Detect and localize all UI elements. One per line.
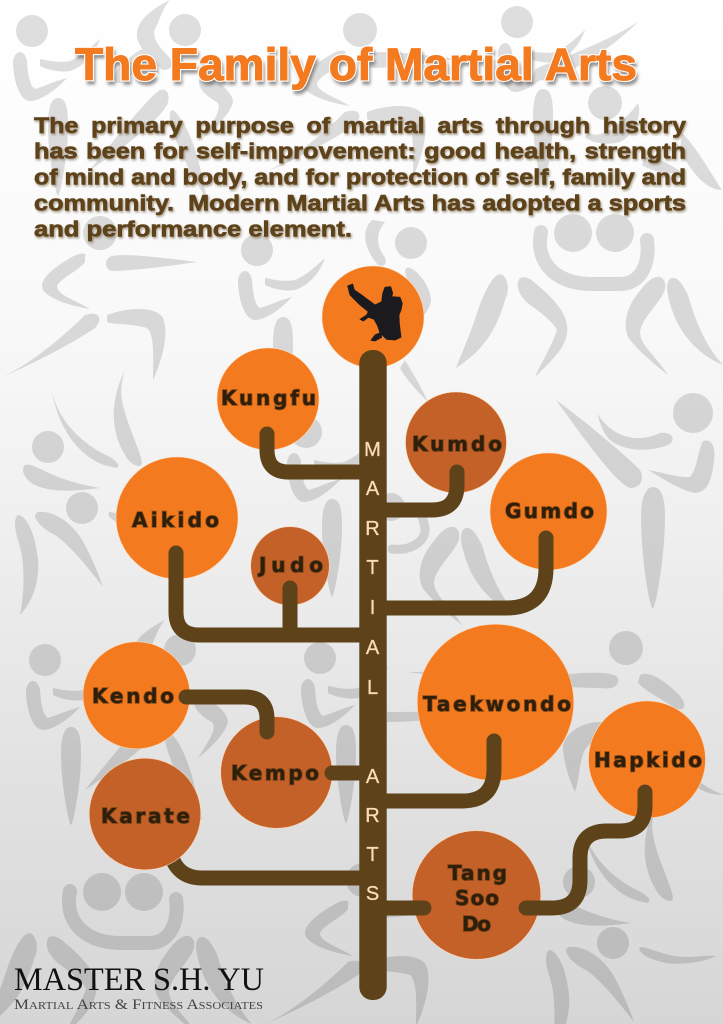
intro text block: The primary purpose of martial arts through history [35,114,688,140]
label: Kendo: Kendo [92,684,174,708]
title: The Family of Martial Arts [75,39,637,90]
node: Gumdo circle [490,453,607,570]
trunk label: MARTIAL ARTS: T [366,844,379,866]
trunk label: MARTIAL ARTS: R [365,518,380,540]
trunk label: MARTIAL ARTS [364,439,381,905]
node: Kungfu circle [217,348,319,450]
label: Tang Soo Do [448,861,507,936]
trunk label: MARTIAL ARTS: T [366,557,379,579]
label: Gumdo: Gumdo [505,499,594,523]
node: Kendo circle [83,642,190,749]
logo: Master S.H. Yu: Martial Arts & Fitness Associates [14,997,263,1013]
intro text block: and performance element. [34,216,352,242]
figure fragment right of the trunk [377,493,425,549]
trunk label: MARTIAL ARTS: L [367,677,378,699]
trunk label: MARTIAL ARTS: A [366,766,380,788]
intro text block [34,113,688,243]
label: Tang Soo Do: Do [462,912,491,936]
icon: flying kick silhouette [348,284,402,341]
branch: Tang Soo Do to Hapkido [526,792,645,908]
tree diagram [83,266,706,1000]
title: The Family of Martial Arts [75,39,637,90]
branch: Kumdo [373,472,457,510]
branch: Kungfu [267,434,373,472]
trunk label: MARTIAL ARTS: A [366,478,380,500]
intro text block: of mind and body, and for protection of self, family and [34,164,686,190]
label: Tang Soo Do: Soo [455,886,499,910]
node: Judo circle [251,527,329,605]
trunk label: MARTIAL ARTS: A [366,637,380,659]
trunk label: MARTIAL ARTS: M [364,439,381,461]
node: Tang Soo Do circle [412,831,541,959]
intro text block: community. Modern Martial Arts has adopted a sports [34,190,686,216]
logo: Master S.H. Yu [14,962,264,1013]
label: Hapkido: Hapkido [594,748,702,772]
node: Taekwondo circle [417,624,574,781]
trunk label: MARTIAL ARTS: S [366,883,379,905]
node: top circle [322,266,424,368]
label: Tang Soo Do: Tang [448,861,507,885]
intro text block: and performance element. [35,218,353,243]
label: Kumdo: Kumdo [412,432,502,456]
branch: Tang Soo Do [373,900,424,916]
centre figure behind trunk top [365,220,431,402]
branch: Taekwondo [373,741,494,801]
label: Kungfu: Kungfu [221,386,316,410]
node: Hapkido circle [588,701,706,818]
lower right figure behind Hapkido [387,631,723,795]
branch: Aikido and Judo [176,553,373,635]
branches [176,434,645,908]
intro text block: community. Modern Martial Arts has adopted a sports [35,192,687,217]
branch: Karate [171,855,373,878]
label: Aikido: Aikido [132,508,219,532]
node: Karate circle [89,758,201,870]
node: Kempo circle [221,717,332,828]
label: Kempo: Kempo [231,761,319,785]
logo: Master S.H. Yu: MASTER S.H. YU [14,962,264,998]
branch: Kempo [332,766,373,780]
trunk label: MARTIAL ARTS: R [365,805,380,827]
branch: Gumdo [373,538,546,608]
label: Karate: Karate [101,804,190,828]
branch: Kendo to Kempo [186,697,267,732]
node: Kumdo circle [406,392,506,493]
trunk [359,350,387,1000]
title: The Family of Martial Arts [77,43,639,94]
trunk label: MARTIAL ARTS: I [370,597,375,619]
intro text block: has been for self-improvement: good health, strength [34,138,686,164]
top right figure [534,22,722,190]
label: Taekwondo: Taekwondo [423,692,571,716]
label: Judo: Judo [257,553,323,577]
intro text block: of mind and body, and for protection of self, family and [35,166,687,191]
intro text block: has been for self-improvement: good health, strength [35,140,687,165]
intro text block: The primary purpose of martial arts through history [34,113,687,138]
node: Aikido circle [116,457,238,579]
right figure, mid page [556,393,715,608]
